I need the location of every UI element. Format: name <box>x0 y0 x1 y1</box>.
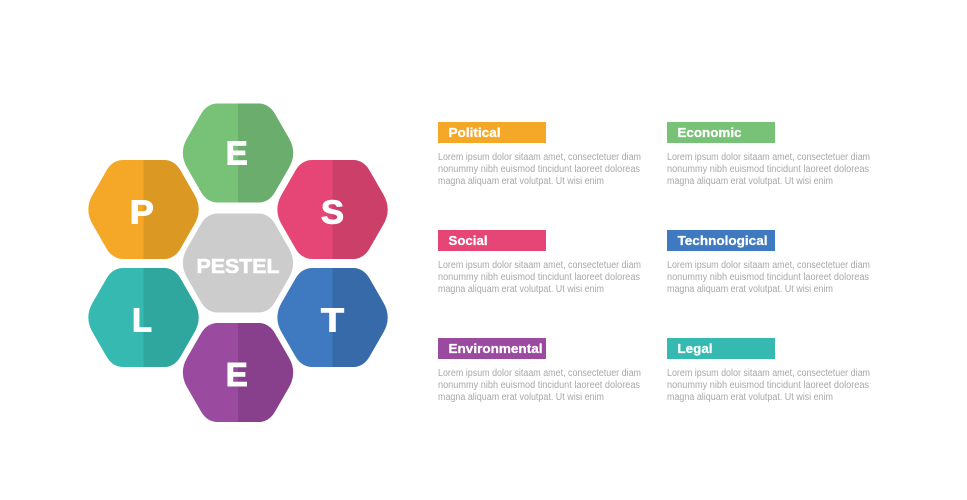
panel: Political: magna aliquam erat volutpat. Ut wisi enim <box>438 176 604 187</box>
panel: Economic: nonummy nibh euismod tincidunt laoreet doloreas <box>667 164 869 175</box>
panel: Social: magna aliquam erat volutpat. Ut wisi enim <box>438 284 604 295</box>
panel: Economic: magna aliquam erat volutpat. Ut wisi enim <box>667 176 833 187</box>
panel: Legal: Lorem ipsum dolor sitaam amet, consectetuer diam <box>667 368 870 379</box>
panel: Social <box>438 230 641 295</box>
hexagon: Political P <box>88 160 199 259</box>
hexagon: Social S <box>277 160 388 259</box>
panel: Economic <box>667 122 870 187</box>
panel: Legal <box>667 338 870 403</box>
panel: Environmental: magna aliquam erat volutpat. Ut wisi enim <box>438 392 604 403</box>
panel: Legal: Legal <box>678 342 712 356</box>
panel: Legal: magna aliquam erat volutpat. Ut wisi enim <box>667 392 833 403</box>
panel: Economic: Lorem ipsum dolor sitaam amet, consectetuer diam <box>667 152 870 163</box>
hexagon: centre PESTEL <box>183 214 293 312</box>
panel: Political: Political <box>448 126 500 140</box>
hexagon: Economic E: E <box>226 134 248 172</box>
panel: Technological: nonummy nibh euismod tincidunt laoreet doloreas <box>667 272 869 283</box>
panel: Environmental: Lorem ipsum dolor sitaam amet, consectetuer diam <box>438 368 641 379</box>
hexagon: Environmental E: E <box>226 356 248 393</box>
hexagon: Technological T: T <box>321 302 344 338</box>
hexagon: Environmental E <box>183 323 293 422</box>
panel: Legal: nonummy nibh euismod tincidunt laoreet doloreas <box>667 380 869 391</box>
panel: Technological: Technological <box>678 234 768 248</box>
hexagon: Legal L <box>88 268 199 367</box>
hexagon: Social S: S <box>321 194 344 230</box>
panel: Social: Lorem ipsum dolor sitaam amet, consectetuer diam <box>438 260 641 271</box>
hexagon: Technological T <box>277 268 388 367</box>
hexagon: Legal L: L <box>132 302 152 338</box>
hexagon: Economic E <box>183 104 293 202</box>
panel: Environmental: nonummy nibh euismod tincidunt laoreet doloreas <box>438 380 640 391</box>
panel: Environmental <box>438 338 641 403</box>
panel: Technological: magna aliquam erat volutpat. Ut wisi enim <box>667 284 833 295</box>
panel: Social: nonummy nibh euismod tincidunt laoreet doloreas <box>438 272 640 283</box>
hexagon: centre PESTEL: PESTEL <box>196 256 280 278</box>
panel: Technological <box>667 230 870 295</box>
panel: Social: Social <box>448 234 488 248</box>
panel: Political: nonummy nibh euismod tincidunt laoreet doloreas <box>438 164 640 175</box>
panel: Technological: Lorem ipsum dolor sitaam amet, consectetuer diam <box>667 260 870 271</box>
panel: Environmental: Environmental <box>448 342 542 356</box>
hexagon: Political P: P <box>130 194 154 230</box>
panel: Economic: Economic <box>678 126 742 140</box>
panel: Political: Lorem ipsum dolor sitaam amet, consectetuer diam <box>438 152 641 163</box>
panel: Political <box>438 122 641 187</box>
